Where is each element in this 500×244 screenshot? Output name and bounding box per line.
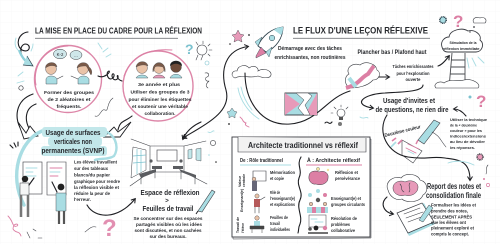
column: reflective architect: persévérance	[335, 176, 361, 181]
heading: SVNP: verticales non	[54, 138, 92, 146]
icon: stained glass mosaic	[285, 93, 317, 115]
text: SVNP description: sur des tableaux	[74, 166, 108, 171]
column: reflective architect: Réflexion et	[335, 170, 359, 175]
column: traditional role: Enseignant(e)	[239, 188, 244, 212]
icon: hand writing with second colour pen	[391, 120, 446, 163]
column: traditional role: individuelles	[270, 227, 291, 232]
column: traditional role: Rôle de	[270, 190, 280, 195]
arrow: brain to notebook	[383, 197, 393, 214]
icon: ladder to thought cloud: Stimulation de la	[450, 40, 477, 45]
column: reflective architect: À : Architecte réflexif	[307, 157, 360, 164]
column: traditional role: l'élève	[240, 222, 245, 233]
column: traditional role: centrale	[241, 173, 246, 187]
column: reflective architect: Résolution de	[331, 216, 358, 221]
title: la mise en place du cadre: LA MISE EN PLACE DU CADRE POUR LA RÉFLEXION	[35, 26, 202, 36]
arrow: note to prompts heading	[454, 109, 466, 116]
column: traditional role: et copie	[270, 176, 285, 181]
text: reflection space description: sont discutées, et non cachées	[134, 228, 202, 233]
icon: rocket smoke cloud	[232, 66, 271, 78]
icon: ladder to thought cloud	[435, 29, 484, 88]
heading: report of notes: consolidation finale	[426, 191, 481, 200]
text: groups of three: Utiliser des groupes de 3	[130, 90, 190, 94]
arrow: curve into prompts heading	[362, 85, 423, 108]
text: low floor high ceiling: Plancher bas / Plafond haut	[358, 49, 427, 56]
text: groups of three: 3e année et plus	[138, 82, 180, 87]
icon: pink question mark: ?	[102, 215, 117, 242]
icon: speech bubbles K-2: K-2	[57, 52, 64, 57]
text: second colour technique: au lieu de dévoiler	[450, 139, 485, 144]
text: reflection space description	[134, 216, 203, 239]
icon: question mark with dot: ?	[476, 92, 486, 111]
arrow: groups of three to room	[183, 122, 201, 139]
text: groups of three: collaboration.	[144, 111, 176, 116]
text: SVNP description	[74, 160, 120, 202]
text: rich tasks for exploration	[392, 64, 434, 82]
text: reflection space description: Se concentrer sur des espaces	[134, 216, 203, 221]
column: traditional role: travail	[270, 221, 280, 226]
text: second colour technique: couleur » pour les	[450, 128, 482, 133]
text: rich tasks for exploration: Tâches enrichissantes	[392, 64, 434, 69]
text: second colour technique: de la « deuxième	[450, 122, 478, 128]
arrow: curve to final report	[383, 115, 470, 180]
panel: groups of two circle	[34, 46, 102, 112]
text: groups of two	[44, 90, 94, 110]
icon: bulb and doodles above panel	[325, 105, 368, 126]
text: report description: que les élèves ont	[431, 220, 466, 225]
panel: SVNP vertical surfaces	[17, 127, 120, 224]
icon: speech bubbles K-2: ...	[74, 52, 78, 58]
text: groups of two: de 2 aléatoires et	[48, 97, 91, 103]
icon: three students	[136, 61, 182, 78]
illustration: students at boards	[20, 162, 66, 224]
text: reflection space description: partagés visibles où les idées	[136, 222, 202, 227]
column: traditional role: et explications	[270, 202, 296, 207]
text: SVNP description: graphique pour rendre	[74, 179, 120, 184]
text: report description: SEULEMENT APRÈS	[431, 214, 472, 220]
icon: pencil	[196, 190, 215, 214]
icon: ladder to thought cloud: réflexion immédiate	[442, 46, 480, 51]
illustration: classroom	[130, 139, 207, 186]
arrow: swoosh from rocket to road cloud	[245, 73, 350, 124]
icon: two talking children	[45, 63, 92, 84]
text: second colour technique: indices/extensions	[450, 134, 486, 138]
arrow: outlined arrow to SVNP right	[104, 122, 131, 137]
arrow: S curve from rocket to groups	[183, 46, 248, 138]
icon: decorative dots right of room	[208, 131, 217, 163]
icon: question mark with dot	[468, 92, 486, 111]
text: report description: Formaliser les idées et	[431, 202, 476, 208]
text: groups of three: pour éliminer les étiquettes	[128, 97, 192, 102]
text: SVNP description: blancs/du papier	[74, 172, 110, 178]
heading: prompts and questions: Usage d'invites et	[383, 96, 436, 105]
text: report description: pleinement exploré et	[431, 226, 475, 230]
icon: cloud with pink road	[345, 63, 389, 88]
column: reflective architect: Enseignant(e) et	[331, 196, 362, 201]
text: groups of three	[128, 82, 192, 116]
title: le flux d'une leçon: LE FLUX D'UNE LEÇON RÉFLEXIVE	[293, 26, 428, 36]
panel: final report	[383, 174, 481, 236]
heading: reflection space: >	[165, 198, 169, 204]
heading: SVNP: permanentes (SVNP)	[42, 147, 105, 155]
heading: prompts and questions: de questions, ne rien dire	[376, 105, 448, 114]
text: report description	[431, 202, 476, 236]
icon: squiggle connector	[98, 71, 122, 81]
heading: SVNP: Usage de surfaces	[46, 129, 101, 137]
column: reflective architect	[306, 157, 366, 233]
text: groups of two: Former des groupes	[44, 90, 94, 96]
heading: panel title: Architecte traditionnel vs réflexif	[248, 141, 358, 150]
column: traditional role: Valeur	[237, 176, 242, 187]
column: traditional role: Feuilles de	[270, 215, 289, 220]
text: start with rich tasks	[274, 46, 346, 61]
icon: brain in thought bubble	[387, 174, 427, 202]
label: second colour: Deuxième couleur	[384, 124, 421, 139]
column: reflective architect: collaborative	[331, 228, 356, 233]
heading: report of notes	[426, 182, 481, 200]
icon: question mark and light bulb	[185, 41, 212, 88]
column: reflective architect: groupes circulants	[331, 202, 366, 207]
icon: rocket	[255, 27, 283, 58]
column: traditional role: De : Rôle traditionnel	[240, 158, 283, 164]
text: SVNP description: Les élèves travaillent	[74, 160, 117, 164]
icon: notebook and pencil	[397, 203, 435, 236]
text: report description: prendre des notes,	[431, 208, 468, 214]
text: rich tasks for exploration: pour l'exploration	[396, 71, 430, 76]
column: traditional role: l'enseignant(e)	[270, 196, 296, 201]
icon: gear, question mark and cloud: ?	[453, 12, 463, 31]
heading: reflection space: Espace de réflexion	[140, 188, 200, 197]
text: second colour technique	[450, 117, 488, 150]
icon: pink gear and doodles	[448, 154, 490, 187]
text: start with rich tasks: Démarrage avec des tâches	[278, 46, 342, 52]
text: SVNP description: l'erreur.	[74, 197, 91, 202]
arrow: text to reflection space	[87, 199, 135, 215]
text: second colour technique: Utiliser la technique	[450, 117, 488, 122]
icon: doodles bottom left	[8, 142, 96, 238]
column: reflective architect: problèmes	[331, 222, 351, 227]
icon: curled arrow top left	[15, 32, 33, 66]
icon: stars	[227, 30, 259, 127]
text: SVNP description: réduire la peur de	[74, 191, 110, 196]
panel: architect comparison	[232, 137, 371, 239]
icon: question mark and light bulb: ?	[185, 41, 194, 57]
text: second colour technique: les réponses.	[450, 145, 475, 150]
panel: groups of three circle	[123, 50, 193, 121]
text: SVNP description: la réflexion visible et	[74, 185, 119, 190]
heading: reflection space	[140, 188, 200, 213]
text: groups of two: fréquents.	[56, 104, 82, 110]
heading: prompts and questions	[376, 96, 448, 114]
icon: gear, question mark and cloud	[440, 12, 486, 33]
text: rich tasks for exploration: ouverte	[406, 77, 421, 82]
heading: reflection space: Feuilles de travail	[142, 204, 194, 213]
column: traditional role: Mémorisation	[270, 170, 295, 175]
text: groups of three: et soutenir une véritable	[132, 104, 188, 109]
column: traditional role: Travail de	[235, 216, 240, 233]
icon: speech bubbles K-2	[54, 49, 82, 60]
divider: wavy line	[298, 157, 301, 233]
icon: decorative squiggles left	[17, 43, 132, 134]
arrow: outlined arrow to SVNP left	[18, 122, 38, 139]
heading: report of notes: Report des notes et	[427, 182, 481, 191]
heading: SVNP	[41, 127, 107, 156]
text: report description: compris le concept.	[431, 232, 469, 236]
column: traditional role	[235, 158, 296, 233]
text: start with rich tasks: enrichissantes, non routinières	[274, 55, 346, 61]
text: reflection space description: sur des bureaux.	[150, 234, 186, 239]
